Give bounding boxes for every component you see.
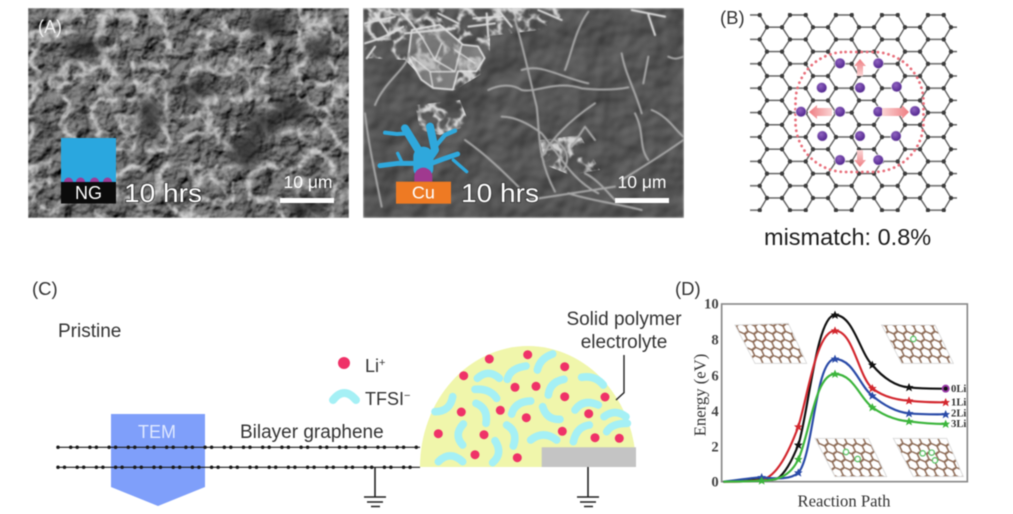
legend: Li+: +: [379, 357, 385, 369]
y axis labels: 6: [711, 368, 719, 384]
inset: 0 Li lattice: [735, 323, 807, 363]
label: 10 hrs right: 10 hrs: [461, 178, 539, 208]
panel D: energy chart: [690, 297, 967, 511]
curve: 2 Li: [723, 355, 950, 482]
strain arrows: [809, 59, 909, 167]
legend: TFSI-: TFSI: [365, 389, 404, 409]
curve labels: 3Li: [951, 419, 966, 430]
bilayer graphene lines: [58, 447, 420, 467]
panel A: SEM image of Cu after 10 hrs: [363, 8, 684, 218]
y axis labels: 4: [711, 404, 719, 420]
x axis title: Reaction Path: [798, 492, 891, 511]
label: Solid polymer electrolyte: electrolyte: [581, 332, 667, 353]
TFSI anions: [435, 354, 627, 463]
plot frame: [722, 304, 967, 482]
panel label: C: (C): [32, 278, 58, 299]
scale bar left: 10 μm: [284, 172, 332, 192]
inset: 1 Li lattice: [882, 325, 953, 363]
ground symbol: electrode: [577, 467, 599, 506]
Li ions: [434, 350, 624, 462]
curve: 0 Li: [723, 311, 946, 482]
label: Solid polymer electrolyte: [566, 309, 682, 353]
lithium atoms: [796, 58, 920, 165]
curve labels: 1Li: [951, 398, 966, 409]
caption: mismatch: mismatch: 0.8%: [764, 224, 931, 250]
legend: Li+: [338, 356, 385, 376]
label: Bilayer graphene: Bilayer graphene: [240, 422, 384, 443]
dotted mismatch boundary: [796, 52, 924, 172]
icon: Li dendrite on Cu: [380, 127, 467, 204]
inset: 2 Li lattice: [815, 438, 887, 477]
panel label: A: (A): [38, 17, 62, 37]
leader line: [616, 355, 624, 400]
curve: 3 Li: [723, 370, 950, 485]
y axis title: Energy (eV): [690, 354, 709, 436]
panel label: B: (B): [720, 7, 745, 28]
TEM grid: [111, 414, 205, 506]
panel label: D: (D): [675, 278, 701, 299]
label: 10 hrs left: 10 hrs: [124, 178, 202, 208]
curve: 1 Li: [723, 326, 950, 482]
TEM grid: TEM: [138, 422, 176, 442]
scale bar left: [280, 172, 334, 203]
heading: Pristine: Pristine: [58, 321, 121, 342]
icon: Li dendrite on Cu: Cu: [412, 182, 435, 202]
scale bar right: 10 μm: [618, 172, 666, 192]
inset: NG schematic: NG: [75, 183, 102, 203]
inset: 3 Li lattice: [893, 438, 963, 477]
inset: NG schematic: [61, 138, 116, 204]
legend: TFSI-: −: [404, 390, 410, 402]
y axis labels: 2: [711, 440, 719, 456]
y axis labels: [704, 297, 719, 491]
ground symbol: graphene: [364, 467, 386, 506]
legend: TFSI-: [333, 389, 410, 409]
panel B: graphene lattice with lithium atoms: [750, 13, 957, 212]
panel A: SEM image of NG after 10 hrs: [28, 8, 349, 218]
y axis labels: 0: [711, 475, 719, 491]
legend: Li+: Li: [365, 356, 379, 376]
electrolyte droplet: [420, 346, 636, 467]
graphene honeycomb lattice: [750, 13, 957, 212]
scale bar right: [615, 172, 669, 203]
end marker: 0 Li: [942, 385, 950, 393]
curve labels: 0Li: [951, 384, 966, 395]
label: Solid polymer electrolyte: Solid polymer: [566, 309, 682, 330]
y axis labels: 8: [711, 333, 719, 349]
y axis labels: 10: [704, 297, 719, 313]
curve labels: [951, 384, 966, 430]
curve labels: 2Li: [951, 409, 966, 420]
